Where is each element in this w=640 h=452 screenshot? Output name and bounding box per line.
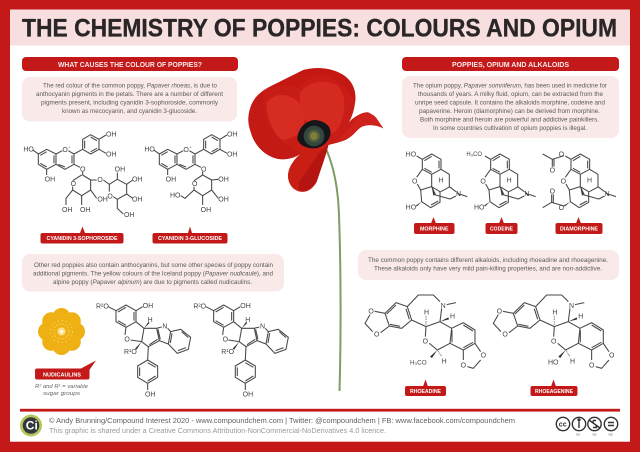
icons: creative commons licence: ND [608,432,614,436]
chemical structure: nudicaulin 1 [96,303,191,398]
chemical structure: cyanidin 3-sophoroside: + [68,145,70,149]
label: morphine: MORPHINE [420,227,449,233]
footer [20,409,620,436]
chemical structure: rhoeagenine: H [578,314,583,321]
chemical structure: diamorphine: O [550,189,556,196]
chemical structure: nudicaulin 2: OH [240,303,251,310]
label: nudicaulins [35,360,96,380]
credit text: This graphic is shared under a Creative Commons Attribution-NonCommercial-NoDerivatives 4.0 licence. [49,428,386,435]
chemical structure: cyanidin 3-sophoroside: O [80,167,86,174]
chemical structure: rhoeadine: N [441,303,446,310]
chemical structure: cyanidin 3-sophoroside: O [62,147,68,154]
chemical structure: cyanidin 3-sophoroside: O [71,181,77,188]
chemical structure: codeine: N [524,191,529,198]
label: cyanidin 3-sophoroside [40,226,124,244]
chemical structure: nudicaulin 2: R¹O [221,349,235,356]
chemical structure: cyanidin 3-glucoside: O [201,167,207,174]
chemical structure: rhoeadine: O [368,308,374,315]
text block: opium poppy: unripe seed capsule. It contains the alkaloids morphine, codeine and [415,100,605,106]
logo: compound interest: Ci [26,419,38,433]
icons: creative commons licence: cc [559,422,567,428]
chemical structure: rhoeagenine: O [551,338,557,345]
label: nudicaulins: NUDICAULINS [43,372,82,378]
chemical structure: cyanidin 3-sophoroside: OH [132,177,142,184]
label: rhoeadine: RHOEADINE [410,389,442,395]
label: cyanidin 3-sophoroside: CYANIDIN 3-SOPHOROSIDE [46,236,118,242]
chemical structure: morphine: N [456,191,461,198]
chemical structure: rhoeagenine: H [570,358,575,365]
chemical structure: cyanidin 3-sophoroside: OH [106,131,116,138]
text block: red colour: The red colour of the common poppy, Papaver rhoeas, is due to [43,82,218,90]
chemical structure: diamorphine: O [550,167,556,174]
chemical structure: morphine: HO [406,152,417,159]
chemical structure: morphine: O [412,178,418,185]
chemical structure: rhoeadine: H₃CO [410,359,427,366]
stem [326,150,341,391]
chemical structure: diamorphine: O [559,205,565,212]
chemical structure: rhoeadine: H [442,358,447,365]
chemical structure: codeine: O [480,178,486,185]
chemical structure: rhoeagenine: O [502,332,508,339]
chemical structure: cyanidin 3-sophoroside: OH [97,197,108,204]
heading: what causes the colour of poppies: WHAT CAUSES THE COLOUR OF POPPIES? [58,60,202,69]
chemical structure: nudicaulin 1: OH [143,303,153,310]
label: codeine: CODEINE [490,227,514,233]
chemical structure: rhoeagenine: H [552,309,557,316]
chemical structure: cyanidin 3-sophoroside: OH [132,197,142,204]
chemical structure: cyanidin 3-glucoside: HO [144,146,155,153]
chemical structure: cyanidin 3-sophoroside: HO [23,146,34,153]
heading: poppies opium and alkaloids: POPPIES, OPIUM AND ALKALOIDS [452,60,569,69]
chemical structure: nudicaulin 1: OH [145,391,155,398]
chemical structure: rhoeagenine: O [497,308,503,315]
chemical structure: cyanidin 3-glucoside: OH [166,177,176,184]
credit text [49,417,515,435]
chemical structure: nudicaulin 2: OH [243,391,253,398]
chemical structure: cyanidin 3-sophoroside: OH [106,152,116,159]
chemical structure: rhoeagenine: O [589,362,595,369]
chemical structure: nudicaulin 2: N [260,323,265,330]
label: diamorphine: DIAMORPHINE [560,227,599,233]
label: diamorphine [556,217,602,234]
chemical structure: nudicaulin 1: H [148,317,153,324]
chemical structure: nudicaulin 1: N [162,323,167,330]
chemical structure: cyanidin 3-glucoside: O [183,147,189,154]
chemical structure: rhoeagenine [493,295,615,369]
chemical structure: rhoeagenine: HO [548,359,559,366]
chemical structure: cyanidin 3-sophoroside: OH [124,212,134,219]
text block: opium poppy: In some countries cultivation of opium poppies is illegal. [433,125,587,132]
flower head [248,68,383,192]
chemical structure: rhoeadine [365,295,487,369]
label: cyanidin 3-glucoside [152,226,228,244]
text block: other red poppies: Other red poppies also contain anthocyanins, but some other species of poppy contain [34,262,273,269]
text block: other red poppies: alpine poppy (Papaver alpinum) are due to pigments called nudicaulins. [53,279,252,286]
chemical structure: nudicaulin 2 [193,303,288,398]
icon: yellow poppy [38,308,85,355]
heading: what causes the colour of poppies [22,57,238,71]
text block: opium poppy: Both morphine and heroin are powerful and addictive painkillers. [420,116,599,124]
chemical structure: diamorphine: O [559,151,565,158]
label: morphine [414,217,454,234]
chemical structure: cyanidin 3-glucoside: + [189,145,191,149]
chemical structure: diamorphine: N [605,191,610,198]
chemical structure: diamorphine [543,151,616,212]
text block: red colour: known as mecocyanin, and cyanidin 3-glucoside. [62,108,197,115]
heading: poppies opium and alkaloids [402,57,619,71]
chemical structure: codeine: H [507,178,512,185]
text block: opium poppy: The opium poppy, Papaver somniferum, has been used in medicine for [413,82,607,90]
chemical structure: cyanidin 3-sophoroside: OH [115,167,125,174]
label: rhoeagenine [530,380,578,396]
chemical structure: cyanidin 3-sophoroside: OH [62,207,72,214]
chemical structure: cyanidin 3-glucoside: OH [227,152,237,159]
chemical structure: cyanidin 3-sophoroside: OH [80,207,90,214]
text block: common poppy: The common poppy contains different alkaloids, including rhoeadine and rhoeagenine. [368,257,608,264]
chemical structure: codeine: H₃CO [466,152,482,158]
chemical structure: cyanidin 3-sophoroside: OH [45,177,55,184]
text block: common poppy [358,250,619,280]
logo: compound interest [20,414,42,436]
text block: opium poppy: thousands of years. A milky fluid, opium, can be extracted from the [418,91,604,98]
chemical structure: cyanidin 3-glucoside [144,131,237,214]
panel: what causes the colour [22,57,238,244]
chemical structure: rhoeadine: O [423,338,429,345]
note: variable sugar groups [35,384,88,397]
chemical structure: morphine [406,152,467,212]
chemical structure: nudicaulin 1: R¹O [124,349,137,356]
icons: creative commons licence: BY [576,432,581,436]
chemical structure: rhoeadine: H [450,314,455,321]
panel: poppies opium and alkaloids [358,57,619,396]
chemical structure: cyanidin 3-glucoside: HO [170,192,181,199]
chemical structure: nudicaulin 1: O [124,336,130,343]
chemical structure: cyanidin 3-glucoside: OH [218,197,229,204]
chemical structure: cyanidin 3-glucoside: OH [201,207,211,214]
chemical structure: nudicaulin 1: R²O [96,303,109,310]
chemical structure: nudicaulin 2: H [245,317,250,324]
chemical structure: cyanidin 3-glucoside: O [192,181,198,188]
chemical structure: cyanidin 3-glucoside: OH [218,177,229,184]
chemical structure: morphine: H [438,178,443,185]
note: variable sugar groups: sugar groups [43,391,80,397]
icons: creative commons licence: NC [592,432,598,436]
text block: common poppy: These alkaloids only have very mild pain-killing properties, and are non-addictive. [374,266,602,272]
label: rhoeagenine: RHOEAGENINE [535,389,574,395]
text block: red colour [22,77,237,122]
chemical structure: nudicaulin 2: R²O [193,303,207,310]
text block: opium poppy [402,76,619,138]
chemical structure: cyanidin 3-sophoroside: O [97,177,103,184]
chemical structure: rhoeagenine: O [609,353,615,360]
chemical structure: cyanidin 3-sophoroside: O [107,193,113,200]
panel: nudicaulins [22,254,288,398]
icons: creative commons licence [556,417,618,436]
chemical structure: rhoeadine: H [424,309,429,316]
label: rhoeadine [405,380,446,396]
credit text: © Andy Brunning/Compound Interest 2020 - www.compoundchem.com | Twitter: @compoundchem | FB: www.facebook.com/compoundchem [49,417,515,425]
chemical structure: diamorphine: O [561,178,567,185]
chemical structure: codeine: HO [474,205,485,212]
text block: other red poppies: additional pigments. The yellow colours of the Iceland poppy ( Papaver nudicaule ), and [33,270,273,278]
note: variable sugar groups: R² and R¹ = variable [35,384,88,390]
text block: red colour: anthocyanin pigments in the petals. There are a number of different [36,91,223,98]
chemical structure: rhoeadine: O [374,332,380,339]
label: cyanidin 3-glucoside: CYANIDIN 3-GLUCOSIDE [158,236,223,242]
chemical structure: nudicaulin 2: O [223,336,229,343]
chemical structure: rhoeagenine: N [569,303,574,310]
chemical structure: rhoeadine: O [461,362,467,369]
label: codeine [486,217,518,234]
chemical structure: rhoeadine: O [481,353,487,360]
text block: red colour: pigments present, including cyanidin 3-sophoroside, commonly [41,100,219,106]
chemical structure: morphine: HO [406,205,417,212]
chemical structure: cyanidin 3-sophoroside [23,131,142,219]
chemical structure: codeine [466,152,536,212]
text block: other red poppies [22,254,284,292]
chemical structure: diamorphine: H [587,178,592,185]
illustration: poppy flower and stem [248,68,383,391]
chemical structure: cyanidin 3-glucoside: OH [227,131,237,138]
text block: opium poppy: papaverine. Heroin (diamorphine) can be derived from morphine. [419,108,600,115]
